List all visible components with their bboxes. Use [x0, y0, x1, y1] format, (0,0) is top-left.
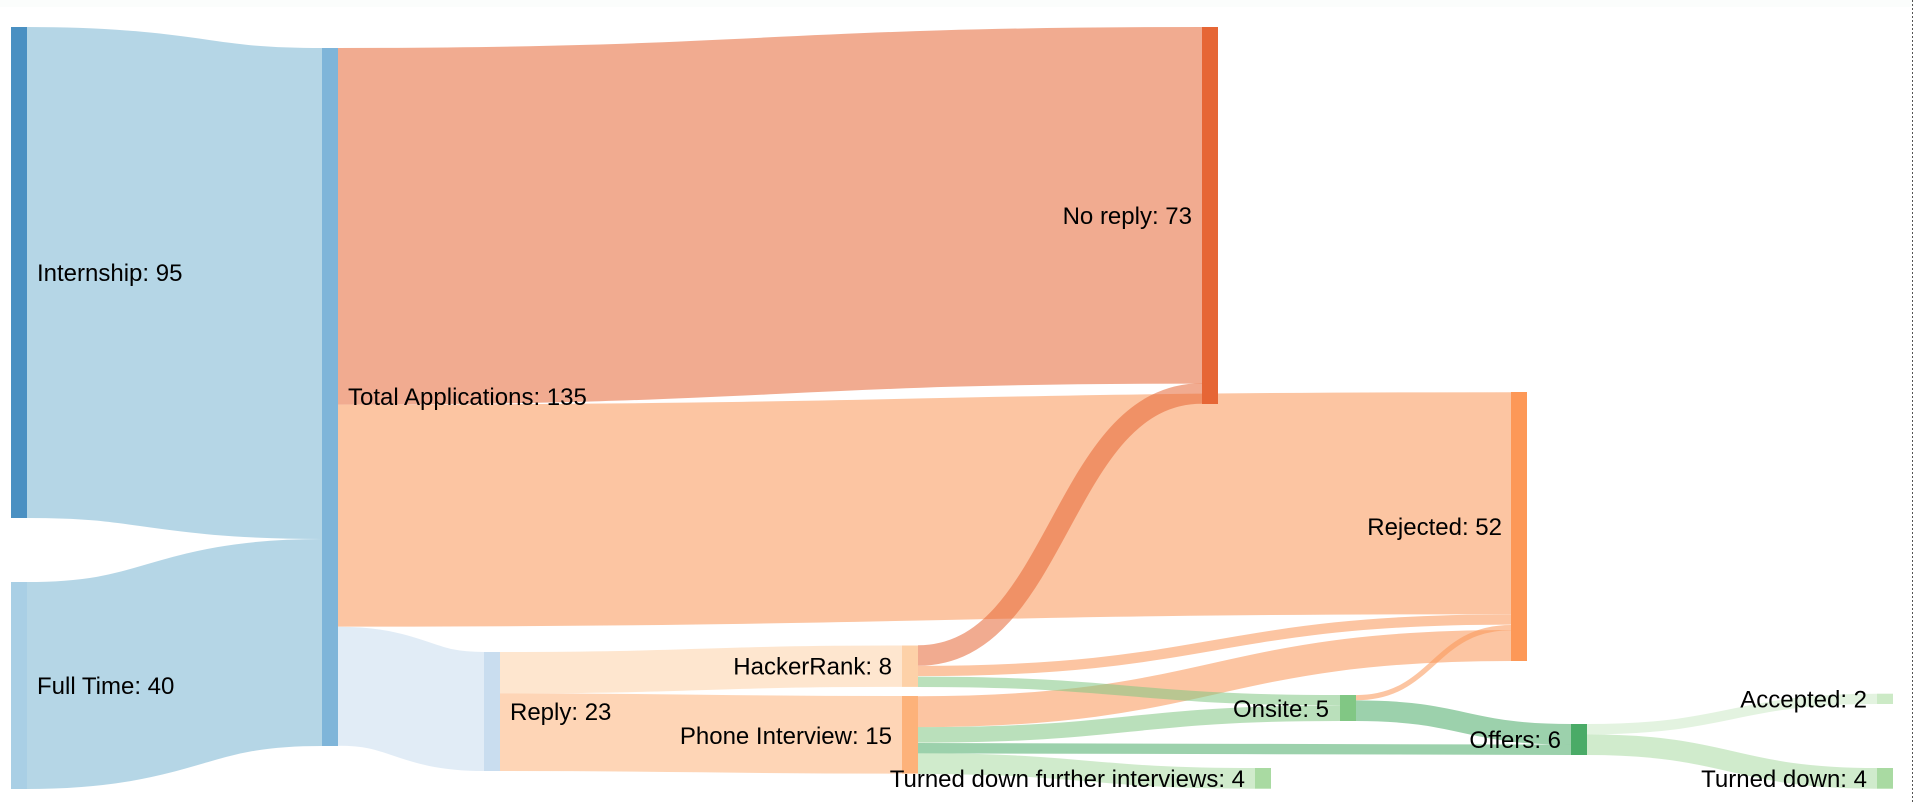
label: No reply: No reply: 73 [1063, 203, 1192, 230]
node: Phone Interview [902, 696, 918, 774]
node: Full Time [11, 582, 27, 789]
label: Total Applications: Total Applications: 135 [348, 384, 587, 411]
link: Phone Interview to Onsite [918, 713, 1340, 735]
label: Turned down: Turned down: 4 [1701, 766, 1867, 793]
link: Total Applications to No reply [338, 205, 1202, 226]
label: Rejected: Rejected: 52 [1367, 514, 1502, 541]
node: No reply [1202, 27, 1218, 404]
label: Reply: Reply: 23 [510, 699, 611, 726]
link: Offers to Turned down [1587, 745, 1877, 778]
label: Turned down further interviews: Turned down further interviews: 4 [890, 766, 1245, 793]
label: Internship: Internship: 95 [37, 260, 182, 287]
node: HackerRank [902, 646, 918, 687]
link: Onsite to Rejected [1356, 628, 1511, 698]
node: Reply [484, 652, 500, 771]
node: Total Applications [322, 48, 338, 746]
link: Internship to Total Applications [27, 272, 322, 294]
node: Offers [1571, 724, 1587, 755]
node labels [37, 203, 1867, 793]
link: Onsite to Offers [1356, 711, 1571, 734]
flow links [27, 205, 1877, 778]
link: HackerRank to Rejected [918, 620, 1511, 671]
node: Rejected [1511, 392, 1527, 661]
link: Reply to HackerRank [500, 666, 902, 673]
link: Total Applications to Rejected [338, 503, 1511, 516]
link: Total Applications to Reply [338, 686, 484, 712]
right dotted edge [1912, 0, 1914, 802]
link: HackerRank to No reply [918, 394, 1202, 656]
node: Turned down further interviews [1255, 768, 1271, 789]
link: Phone Interview to Rejected [918, 646, 1511, 712]
label: HackerRank: HackerRank: 8 [733, 654, 892, 680]
top edge strip [0, 0, 1914, 7]
link: Offers to Accepted [1587, 699, 1877, 729]
label: Accepted: Accepted: 2 [1740, 686, 1867, 714]
link: Phone Interview to Offers [918, 748, 1571, 750]
link: Phone Interview to Turned down further interviews [918, 764, 1255, 778]
node: Turned down [1877, 768, 1893, 789]
link: HackerRank to Onsite [918, 682, 1340, 700]
label: Onsite: Onsite: 5 [1233, 696, 1329, 723]
link: Full Time to Total Applications [27, 642, 322, 686]
label: Phone Interview: Phone Interview: 15 [680, 723, 892, 750]
label: Full Time: Full Time: 40 [37, 673, 174, 700]
node: Accepted [1877, 694, 1893, 704]
node: Internship [11, 27, 27, 518]
label: Offers: Offers: 6 [1469, 727, 1561, 754]
node: Onsite [1340, 695, 1356, 721]
link: Reply to Phone Interview [500, 732, 902, 735]
